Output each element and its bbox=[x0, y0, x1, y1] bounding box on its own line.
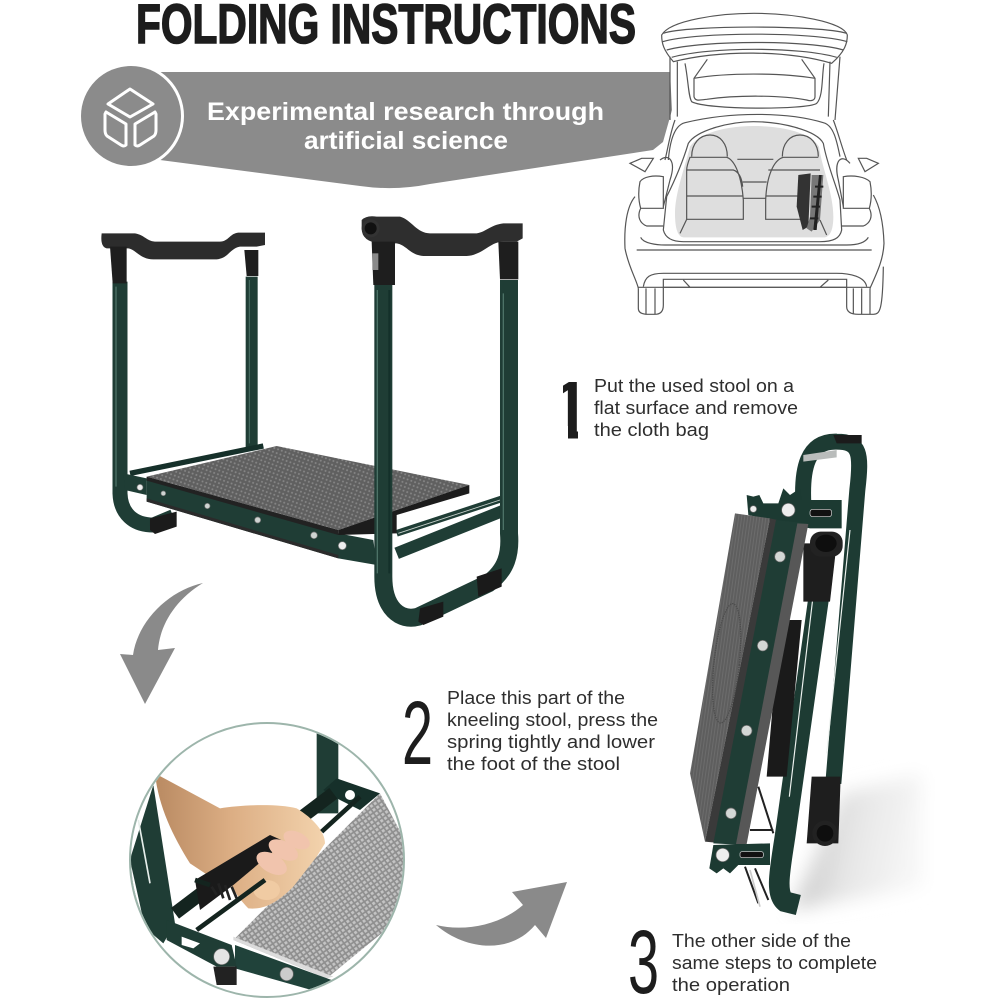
dark under bar bbox=[767, 620, 802, 777]
side rails bbox=[130, 446, 263, 473]
top bracket bbox=[747, 488, 842, 528]
step 3 text: same steps to complete bbox=[672, 952, 877, 973]
front handle bbox=[362, 216, 523, 256]
banner heading bbox=[207, 98, 604, 155]
cross frame bbox=[323, 778, 380, 810]
step 2 text: Place this part of the bbox=[447, 687, 625, 708]
banner bbox=[78, 63, 672, 188]
step 1 text: flat surface and remove bbox=[594, 397, 798, 418]
arrow: right bbox=[436, 882, 567, 946]
spring mechanism bbox=[745, 787, 773, 903]
front frame tube bbox=[383, 280, 509, 618]
foot bbox=[213, 967, 237, 985]
spring bbox=[195, 880, 210, 885]
frame strip bbox=[713, 520, 807, 845]
top clip bbox=[803, 450, 837, 462]
rod bbox=[197, 797, 360, 930]
step 3 text: The other side of the bbox=[672, 930, 851, 951]
step 3 text bbox=[672, 930, 877, 995]
seat frame strip bbox=[147, 477, 377, 565]
back handle bbox=[101, 233, 265, 259]
illustration: car with open trunk bbox=[625, 13, 884, 314]
rear rail bbox=[175, 793, 333, 913]
step 2 text: spring tightly and lower bbox=[447, 731, 655, 752]
numeral 2: 2 bbox=[402, 682, 433, 783]
folded stool bbox=[690, 435, 922, 910]
step 1 bbox=[540, 366, 798, 456]
hand bbox=[155, 773, 325, 909]
floor shadow bbox=[790, 773, 922, 910]
step 2 text: kneeling stool, press the bbox=[447, 709, 658, 730]
black grip bbox=[195, 835, 285, 910]
banner heading: Experimental research through bbox=[207, 98, 604, 126]
arrow: down bbox=[120, 583, 203, 704]
step 3 bbox=[628, 911, 877, 1000]
step 1 text: Put the used stool on a bbox=[594, 375, 795, 396]
bracket bbox=[167, 920, 237, 967]
seat pad bbox=[233, 793, 410, 978]
bolts bbox=[716, 503, 795, 862]
detail circle: hand pressing spring bbox=[127, 720, 410, 1000]
banner heading: artificial science bbox=[304, 127, 508, 155]
icon: cube bbox=[105, 89, 156, 146]
seat pad bbox=[147, 446, 469, 530]
mini folded stool bbox=[797, 173, 823, 232]
sleeves bbox=[803, 543, 837, 602]
step 1 text: the cloth bag bbox=[594, 419, 709, 440]
step 1 text bbox=[594, 375, 798, 440]
step 2 bbox=[402, 682, 658, 783]
tubes bbox=[779, 442, 859, 905]
back foot bbox=[150, 512, 177, 534]
bolts bbox=[137, 484, 346, 550]
back frame tubes bbox=[120, 277, 252, 525]
fingers bbox=[254, 830, 310, 900]
step 2 text: the foot of the stool bbox=[447, 753, 620, 774]
upright tube bbox=[317, 730, 338, 813]
product: kneeling stool bbox=[101, 216, 523, 625]
left tube bbox=[127, 785, 175, 943]
front feet bbox=[418, 568, 502, 625]
step 3 text: the operation bbox=[672, 974, 790, 995]
bottom bracket bbox=[709, 843, 770, 873]
numeral 1: 1 bbox=[546, 366, 596, 456]
step 2 text bbox=[447, 687, 658, 774]
seat pad bbox=[690, 513, 770, 842]
